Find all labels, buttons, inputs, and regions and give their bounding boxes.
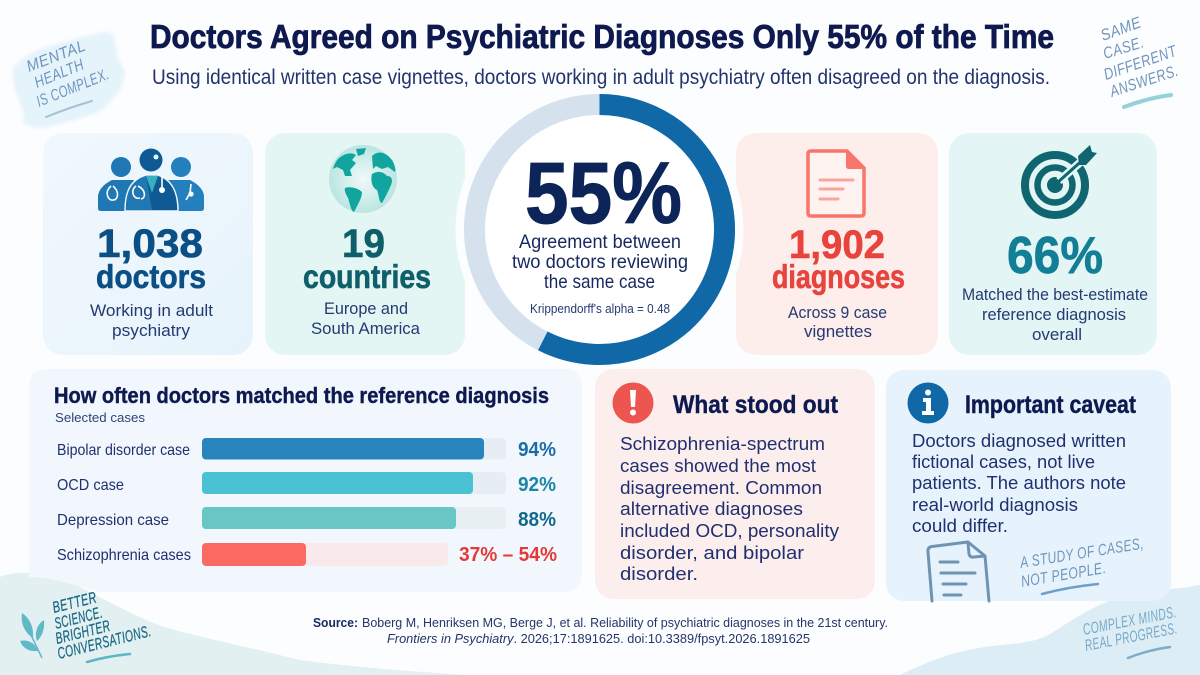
description: Europe and (324, 299, 408, 318)
note: mental health is complex: HEALTH (32, 56, 87, 92)
body text: cases showed the most (620, 456, 816, 476)
stat: 19 countries (303, 222, 431, 295)
stat: 1,902 diagnoses (772, 223, 905, 295)
body text: could differ. (912, 516, 1008, 536)
body text (912, 431, 1126, 536)
background wave: bottom left (0, 573, 470, 675)
body text: included OCD, personality (620, 521, 839, 541)
description: Across 9 case (788, 303, 887, 322)
bar: ocd: 92% (518, 474, 556, 496)
note: a study of cases: A STUDY OF CASES, (1018, 536, 1145, 572)
bar: depression (57, 507, 556, 531)
bar: bipolar: Bipolar disorder case (57, 442, 190, 459)
bar: depression: Depression case (57, 512, 169, 529)
description: the same case (544, 271, 655, 293)
note: same case different answers: SAME (1099, 14, 1144, 45)
stat: 55%: 55% (525, 145, 682, 242)
panel: what stood out (595, 369, 875, 599)
note: a study of cases (1018, 536, 1145, 594)
heading: What stood out (673, 391, 839, 419)
icon: document (808, 150, 865, 216)
note: better science: CONVERSATIONS. (56, 623, 153, 663)
bar: bipolar: 94% (518, 439, 556, 461)
bar: schizophrenia (57, 543, 557, 566)
body text: alternative diagnoses (620, 499, 803, 519)
card: doctors (43, 133, 253, 355)
panel: bar chart (29, 369, 582, 592)
body text: real-world diagnosis (912, 495, 1078, 515)
icon: target (1025, 145, 1097, 215)
stat: 1,038 doctors: doctors (96, 258, 206, 295)
description: Agreement between (519, 231, 681, 253)
bar: ocd (57, 472, 556, 496)
donut: 55% agreement (456, 86, 744, 374)
description: overall (1032, 325, 1082, 344)
bar: depression: 88% (518, 509, 556, 531)
description (311, 299, 421, 338)
icon: info (908, 382, 948, 424)
description: Working in adult (90, 301, 213, 320)
card: countries (265, 133, 465, 355)
body text: Doctors diagnosed written (912, 431, 1126, 451)
description: reference diagnosis (982, 305, 1126, 324)
stat: 1,038 doctors (96, 222, 206, 295)
note: krippendorff's alpha: Krippendorff's alpha = 0.48 (530, 302, 670, 316)
heading: Important caveat (965, 391, 1137, 419)
description: South America (311, 319, 421, 338)
note: better science (51, 589, 153, 663)
stat: 66%: 66% (1007, 227, 1103, 285)
description (512, 231, 688, 293)
body text: disorder, and bipolar (620, 543, 804, 563)
source citation: Boberg M, Henriksen MG, Berge J, et al. Reliability of psychiatric diagnoses in the 21st century. (362, 615, 888, 630)
chart heading: How often doctors matched the reference diagnosis (54, 383, 549, 408)
bar: schizophrenia: 37% – 54% (459, 544, 557, 566)
bar: schizophrenia: Schizophrenia cases (57, 547, 191, 564)
body text: Schizophrenia-spectrum (620, 434, 825, 454)
source citation: Frontiers in Psychiatry. 2026;17:1891625. doi:10.3389/fpsyt.2026.1891625 (387, 631, 810, 646)
stat: 1,038 doctors: 1,038 (97, 222, 203, 266)
note: complex minds (1082, 604, 1179, 658)
description: vignettes (804, 322, 872, 341)
bar: ocd: OCD case (57, 477, 124, 494)
note: same case different answers: DIFFERENT (1102, 43, 1180, 84)
body text: fictional cases, not live (912, 452, 1095, 472)
title: Doctors Agreed on Psychiatric Diagnoses Only 55% of the Time (150, 18, 1054, 55)
icon: doctors (98, 148, 204, 211)
icon: paper (928, 542, 989, 601)
source citation (313, 615, 888, 646)
description (788, 303, 887, 341)
note: mental health is complex: IS COMPLEX. (34, 66, 112, 111)
panel: important caveat (886, 370, 1171, 601)
card: 66% matched (949, 133, 1157, 355)
description: psychiatry (112, 321, 191, 340)
note: same case different answers: ANSWERS. (1107, 63, 1181, 101)
description: Matched the best-estimate (962, 285, 1148, 304)
card: diagnoses (736, 133, 938, 355)
icon: exclamation (612, 382, 654, 424)
description (90, 301, 213, 340)
stat: 1,902 diagnoses: 1,902 (789, 223, 885, 267)
note: mental health is complex (13, 32, 125, 128)
stat: 19 countries: countries (303, 258, 431, 295)
source citation: Source: (313, 615, 358, 630)
note: mental health is complex: MENTAL (24, 38, 88, 76)
body text (620, 434, 839, 584)
note: better science: SCIENCE. (53, 605, 105, 633)
stat: 1,902 diagnoses: diagnoses (772, 258, 905, 295)
description: two doctors reviewing (512, 251, 688, 273)
note: same case different answers (1099, 14, 1181, 107)
bar: bipolar (57, 438, 556, 461)
note: a study of cases: NOT PEOPLE. (1020, 560, 1107, 591)
body text: disorder. (620, 564, 698, 584)
icon: leaf (20, 613, 44, 658)
background wave: bottom right (900, 585, 1200, 675)
note: same case different answers: CASE. (1101, 34, 1146, 63)
note: better science: BETTER (51, 589, 99, 617)
chart subheading: Selected cases (55, 410, 146, 425)
body text: disagreement. Common (620, 478, 822, 498)
note: better science: BRIGHTER (54, 618, 112, 648)
icon: globe (329, 145, 397, 213)
description (962, 285, 1148, 344)
subtitle: Using identical written case vignettes, doctors working in adult psychiatry often disagreed on the diagnosis. (152, 66, 1050, 89)
body text: patients. The authors note (912, 473, 1126, 493)
stat: 19 countries: 19 (342, 222, 385, 266)
